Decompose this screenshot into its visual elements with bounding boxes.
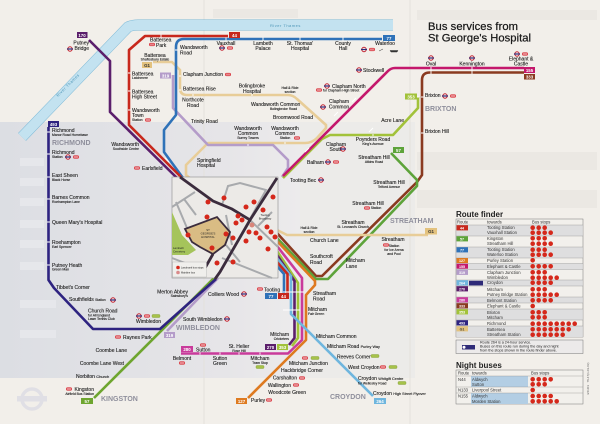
route colour chips: 44 [460, 226, 464, 230]
hospital site [185, 217, 230, 254]
stop labels: south-east: Fair Green [308, 312, 324, 316]
stop labels: north-west: Trinity Road [191, 119, 218, 125]
route finder heading: Route finder [456, 210, 503, 219]
stop labels: north-west: Battersea [144, 53, 166, 59]
destinations: Mitcham [487, 315, 503, 320]
stop labels: south-east: Mitcham [270, 332, 289, 338]
destinations: Battersea [487, 327, 506, 332]
stop labels: Streatham and Clapham: Streatham Hill [358, 155, 390, 161]
stop labels: Streatham and Clapham [290, 56, 534, 270]
bus stop letters [530, 225, 577, 337]
stop labels: north-west: Northcote [182, 98, 204, 104]
stop labels: south-west: Airfield Bus Station [65, 392, 94, 396]
stop labels: route 493: Sainsbury's [171, 294, 188, 298]
stop labels: route 493: Merton Abbey [157, 290, 188, 296]
night table text: towards [472, 370, 487, 376]
destinations: Richmond [487, 321, 507, 326]
cemetery label [173, 246, 186, 254]
route colour chips: 57 [460, 238, 464, 242]
stop labels: south-west: Sutton [213, 356, 227, 362]
route number chips: 280 [183, 347, 191, 352]
stop labels: north-west: Wandsworth [111, 142, 139, 148]
stop labels: south-east: Cricketers [274, 337, 289, 341]
stop labels: Streatham and Clapham: for Clapham High Street [323, 88, 359, 92]
icons: rail [66, 43, 528, 402]
destinations: Wimbledon [487, 275, 509, 280]
night table text: N155 [458, 394, 469, 398]
stop labels: north-west: Hall [339, 46, 347, 52]
stop labels: route 493: Southfields Station [69, 297, 106, 303]
ghost show-through: top strips [213, 9, 597, 208]
stop labels: south-east: Mitcham Junction [289, 361, 328, 367]
stop labels: north-west: Putney [73, 40, 89, 46]
route number chips: 319 [166, 333, 174, 338]
stop labels: north-west: Road [180, 50, 192, 56]
stop labels: north-west: Bridge [75, 46, 89, 52]
route colour chips: G1 [460, 328, 464, 332]
route 77 blue south [277, 266, 284, 294]
route colour chips: 333 [459, 304, 465, 308]
stop labels: north-west: Battersea Rise [183, 86, 216, 92]
stop labels: north-west: Common [275, 131, 295, 137]
route number chips: 77 [269, 294, 274, 299]
table row dividers [456, 225, 583, 326]
night table text: Liverpool Street [472, 388, 502, 392]
destinations: Elephant & Castle [487, 304, 521, 308]
route number chips: 57 [85, 399, 90, 404]
stop labels: north-west: Hospital [197, 163, 215, 169]
cemetery label: Lambeth [173, 246, 184, 250]
stop labels: Streatham and Clapham: Station [371, 206, 381, 210]
stop labels: north-west: Battersea [150, 38, 172, 44]
route colour chips: 155 [459, 265, 465, 269]
stop labels: route 493: Church Road [88, 308, 118, 314]
stop labels: south-west: Rose Hill [232, 349, 246, 353]
route G1 tan [153, 62, 326, 179]
route number chips: 170 [78, 33, 86, 38]
stop labels: route 493: Station [52, 155, 63, 159]
route 264 light blue [277, 258, 373, 396]
destinations: Belmont Station [487, 298, 517, 303]
route 319 lavender [173, 75, 288, 177]
stop labels: route 493: Queen Mary's Hospital [52, 220, 102, 226]
stop labels: route 493 [52, 128, 239, 325]
inset street map [172, 177, 278, 279]
icon: riverboat at Waterloo [379, 49, 398, 52]
stop labels: route 493: Roehampton [52, 240, 81, 246]
stop labels: south-west: Sutton [196, 348, 211, 354]
stop labels: south-west: Tram Stop [252, 361, 268, 365]
stop labels: Streatham and Clapham: Mitcham [346, 258, 365, 264]
stop labels: south-east: Hackbridge Corner [281, 368, 323, 374]
night bus stop letters [530, 377, 559, 404]
stop labels: south-west: Green [213, 361, 227, 367]
route number chips: G1 [428, 229, 434, 234]
stop labels: route 493: East Sheen [52, 173, 78, 179]
stop labels: Streatham and Clapham: Station [389, 244, 399, 248]
print code: 4/41/03 TfL47(1-03-03) [586, 363, 590, 395]
route number chips: 155 [526, 68, 534, 73]
table header: Bus stops [532, 220, 550, 224]
stop labels: north-west: Town [132, 113, 144, 119]
stop labels: north-west: Bolingbroke Road [270, 107, 297, 111]
night table text: Morden Station [472, 399, 501, 404]
stop labels: route 493: Roehampton Lane [52, 200, 80, 204]
stop labels: route 493: Earl Spencer [52, 245, 72, 249]
night table text: Aldwych [472, 377, 488, 382]
table row shading [456, 225, 583, 337]
route 77 blue [164, 39, 382, 178]
destinations: Croydon [487, 280, 503, 285]
stop labels: Streatham and Clapham: Streatham [381, 237, 405, 243]
map panel [172, 177, 278, 278]
route colour chips: 353 [459, 310, 465, 314]
stop labels: Streatham and Clapham: Brixton [425, 93, 441, 99]
route colour chips: 493 [459, 322, 465, 326]
route 319 lavender south [167, 278, 218, 331]
icons: underground roundels [65, 46, 520, 321]
background band: left panel [0, 122, 300, 378]
route number chips: 270 [267, 345, 275, 350]
route number chips: G1 [144, 63, 150, 68]
stop labels: north-west: Clapham Junction [183, 72, 223, 78]
stop labels: north-west: Broomwood Road [273, 115, 313, 121]
stop labels: north-west: Lambeth [253, 41, 273, 47]
stop labels: south-east: Reeves Corner [337, 354, 371, 360]
icon: London Transport roundel watermark [17, 389, 47, 409]
destinations: Streatham Hill [487, 241, 513, 246]
map legend [172, 262, 206, 277]
stop labels: south-east: Wallington [268, 383, 291, 389]
stop labels: north-west: Earlsfield [142, 166, 163, 172]
stop labels: Streatham and Clapham: Streatham Hill [373, 180, 405, 186]
background band: centre panel [300, 122, 415, 378]
stop labels: south-east: Carshalton [273, 376, 297, 382]
stop labels: Streatham and Clapham: Elephant & [509, 56, 534, 62]
night buses heading: Night buses [456, 361, 502, 370]
route colour chips: 280 [459, 298, 465, 302]
stop labels: Streatham and Clapham: Road [310, 260, 322, 266]
stop labels: route 493: Lawn Tennis Club [88, 317, 115, 321]
area names: STREATHAM [390, 218, 434, 225]
route 493 navy [48, 127, 216, 329]
stop labels: north-west: Road [187, 103, 199, 109]
night owl chip [469, 281, 483, 285]
stop labels: Streatham and Clapham: King's Avenue [362, 142, 384, 146]
route number chips [48, 32, 535, 404]
stop labels: Streatham and Clapham: Common [329, 104, 349, 110]
stop labels: Streatham and Clapham: South [329, 147, 343, 153]
stop labels: north-west: Park [156, 43, 167, 49]
stop labels: south-east: Purley [251, 398, 266, 404]
River Thames: River Thames [55, 72, 81, 98]
stop labels: south-west: Mitcham [251, 356, 269, 362]
bus stop markers [186, 194, 278, 266]
stop labels: south-west: St. Helier [229, 344, 250, 350]
stop labels: route 493: Barnes Common [52, 195, 90, 201]
stop labels: Streatham and Clapham: Brixton Hill [425, 129, 449, 135]
stop labels: Streatham and Clapham: Southcroft [310, 254, 333, 260]
route number chips: 353 [407, 94, 415, 99]
night table text [458, 370, 549, 404]
destinations: Clapham Junction [487, 270, 521, 275]
route 155 magenta [283, 68, 524, 176]
night table text: Sutton [472, 382, 485, 387]
stop labels: north-west: Battersea [132, 90, 154, 96]
route number chips: 44 [232, 33, 237, 38]
stop labels: north-west: Wandsworth [234, 126, 262, 132]
stop labels: south-east: Woodcote Green [268, 390, 306, 396]
stop labels: north-west: High Street [132, 94, 158, 100]
route 353 light green north [283, 97, 418, 178]
stop labels: north-west: Palace [255, 46, 271, 52]
route 333 brown [277, 72, 524, 276]
destinations: Elephant & Castle [487, 264, 521, 269]
stop labels: route 493: Colliers Wood [208, 292, 239, 298]
area names: RICHMOND [52, 140, 90, 147]
route colour chips: 319 [459, 271, 465, 275]
route number chips: 44 [281, 294, 286, 299]
route number chips: 333 [526, 74, 534, 80]
hospital label [201, 228, 215, 239]
destinations [487, 225, 528, 337]
hospital label: ST [206, 228, 210, 232]
stop labels: Streatham and Clapham: St. Leonard's Church [337, 225, 369, 229]
destinations: Tooting Station [487, 247, 515, 252]
stop labels: route 493: for All England [88, 314, 110, 318]
stop labels: Streatham and Clapham: Acre Lane [381, 118, 404, 124]
stop labels: north-west: County [335, 41, 351, 47]
stop labels: south-west: Coombe Lane [96, 348, 127, 354]
route number chips: 57 [396, 148, 401, 153]
stop labels: north-west: Station [132, 118, 143, 122]
stop labels: north-west: Southside Centre [113, 147, 139, 151]
stop labels: south-east: Croydon Whitgift Centre [358, 376, 403, 382]
area names: KINGSTON [101, 396, 138, 403]
map legend: Landmark bus stops [181, 266, 204, 270]
stop labels: south-east: Streatham [313, 291, 336, 297]
destinations: Mitcham [487, 287, 503, 292]
stop labels: Streatham and Clapham: Atkins Road [365, 160, 383, 164]
grey roads [172, 183, 278, 278]
stop labels: south-west: Coombe Lane West [80, 361, 125, 367]
stop labels: Streatham and Clapham: Clapham [326, 142, 346, 148]
stop labels: Streatham and Clapham: Stockwell [363, 68, 384, 74]
stop labels: south-west: Belmont [173, 356, 192, 362]
route colour chips [456, 225, 468, 332]
Tooting Broadway label: Tooting [260, 213, 270, 217]
stop labels: route 493: Putney Heath [52, 263, 83, 269]
fold line [204, 0, 410, 424]
stop labels: south-west [65, 335, 269, 396]
night buses table [456, 370, 583, 404]
24-hour service note: Route 264 is a 24-hour service. [480, 341, 531, 345]
stop labels: north-west: Surrey Towers [237, 136, 259, 140]
route 170 purple [89, 40, 178, 179]
table header: Route [457, 220, 469, 224]
stop labels: north-west: Shaftesbury Estate [141, 58, 169, 62]
area names: WIMBLEDON [176, 325, 220, 332]
stop labels: north-west: Latchmere [132, 76, 148, 80]
stop labels: route 493: Black Horse [52, 178, 70, 182]
table header: towards [487, 220, 502, 224]
destinations: Purley Station [487, 258, 514, 263]
stop labels: route 493: Tibbet's Corner [56, 285, 90, 291]
stop labels: route 493: Green Man [52, 268, 69, 272]
night table text: N133 [458, 388, 469, 392]
route 44 red [129, 36, 228, 178]
blue highlight [471, 376, 528, 404]
route finder table [456, 219, 583, 337]
stop labels: Streatham and Clapham: Poynders Road [356, 137, 390, 143]
stop labels: south-east: Mitcham Road Purley Way [327, 344, 380, 350]
stop labels: Streatham and Clapham: Balham [307, 160, 324, 166]
route 44 red south [277, 262, 288, 294]
route colour chips: 127 [459, 259, 465, 263]
stop labels: south-west: Raynes Park [123, 335, 152, 341]
stop labels: north-west: Common [238, 131, 258, 137]
Tooting Broadway label [259, 213, 272, 220]
stop labels: route 493: Richmond [52, 150, 75, 156]
24-hour service note: Buses on this route run during the day and night [480, 345, 559, 349]
cemetery label: Cemetery [173, 250, 186, 254]
stop labels: north-west: Waterloo [375, 41, 395, 47]
stop labels: north-west: Springfield [197, 158, 221, 164]
stop labels: south-east: Mitcham Common [316, 334, 357, 340]
route number chips: 353 [279, 345, 287, 350]
route G1 tan south [277, 230, 428, 235]
Tooting Broadway label: Broadway [259, 216, 272, 220]
icons: tram [152, 314, 406, 384]
route colour chips: 264 [459, 282, 465, 286]
stop labels: south-east: Mitcham [308, 307, 327, 313]
route 57 green north [277, 153, 417, 279]
destinations: Kingston [487, 236, 504, 241]
stop labels: south-east: Tooting [264, 288, 280, 294]
stop labels: Streatham and Clapham: Church Lane [310, 238, 339, 244]
stop labels: Streatham and Clapham: Streatham Hill [352, 201, 384, 207]
stop labels: Streatham and Clapham: Oval [426, 62, 436, 68]
stop labels: Streatham and Clapham: and Pool [387, 252, 401, 256]
stop labels: north-west: Wandsworth [180, 45, 208, 51]
destinations: Vauxhall Station [487, 230, 518, 235]
stop labels: north-west [73, 38, 395, 172]
stop labels: north-west: Wandsworth Common [251, 102, 300, 108]
destinations: Brixton [487, 310, 501, 315]
stop labels: Streatham and Clapham: Kennington [459, 62, 485, 68]
route 270 purple south [277, 255, 294, 345]
stop labels: Streatham and Clapham: for Ice Arena [384, 248, 404, 252]
hospital label: GEORGE'S [201, 232, 215, 236]
stop labels: route 493: South Wimbledon [183, 317, 223, 323]
stop labels: route 493: Manor Road Homebase [52, 133, 88, 137]
route number chips: 493 [50, 122, 58, 127]
stop labels: north-west: section [285, 90, 295, 94]
stop labels: north-west: Station [280, 136, 290, 140]
stop ticks [47, 34, 472, 354]
stop labels: south-east: West Croydon [348, 365, 380, 371]
route 127 orange [248, 241, 315, 398]
destinations: Streatham Station [487, 332, 521, 337]
dark main roads [180, 177, 277, 279]
ghost show-through: left rows [20, 158, 56, 338]
route number chips: 319 [162, 73, 170, 78]
stop labels: south-east [251, 288, 427, 404]
route colour chips: 270 [459, 288, 465, 292]
stop labels: route 493: Richmond [52, 128, 75, 134]
route 57 green south [94, 278, 214, 398]
stop labels: Streatham and Clapham: Clapham [329, 99, 349, 105]
stop labels: Streatham and Clapham: Clapham North [332, 84, 366, 90]
route colour chips: 77 [460, 248, 464, 252]
title: St George's Hospital [428, 32, 531, 44]
stop labels: north-west: Wandsworth [271, 126, 299, 132]
stop labels: route 493: Wimbledon [136, 319, 161, 325]
stop labels: north-west: Bolingbroke [239, 84, 265, 90]
stop labels: Streatham and Clapham: Streatham [341, 220, 365, 226]
route number chips: 127 [238, 399, 246, 404]
area names [52, 106, 456, 403]
stop labels: north-west: Hospital [243, 89, 261, 95]
stop labels: Streatham and Clapham: Telford Avenue [378, 185, 400, 189]
destinations: Putney Bridge Station [487, 292, 528, 297]
stop labels: south-west: Norbiton Church [76, 374, 109, 380]
cemetery [172, 212, 196, 255]
stop labels: north-west: Hail & Ride [282, 86, 299, 90]
title: Bus services from [428, 21, 518, 33]
title [428, 21, 531, 44]
24-hour service note: from the stops shown in the route finder above. [480, 349, 557, 353]
night table text: Bus stops [531, 370, 549, 376]
stop labels: north-west: Wandsworth [132, 108, 160, 114]
route number chips: 77 [387, 36, 392, 41]
River Thames: River Thames [270, 23, 301, 28]
table header [457, 220, 550, 224]
stop labels: north-west: Vauxhall [217, 41, 235, 47]
hospital label: HOSPITAL [201, 235, 215, 239]
route number chips: 264 [376, 399, 384, 404]
area names: CROYDON [330, 394, 366, 401]
stop labels: south-east: for Wellesley Road [358, 382, 387, 386]
route 280 pink [181, 246, 302, 354]
stop labels: north-west: St. Thomas' [287, 41, 313, 47]
area names: BRIXTON [425, 106, 456, 113]
stop labels: Streatham and Clapham: Hail & Ride [301, 226, 318, 230]
night table text: Aldwych [472, 394, 488, 398]
map legend: Mainline bus [181, 272, 196, 274]
stop labels: Streatham and Clapham: Castle [514, 62, 528, 68]
stop labels: Streatham and Clapham: section [304, 230, 314, 234]
route 353 light green south [277, 251, 298, 346]
destinations: Waterloo Station [487, 252, 518, 257]
River Thames [22, 23, 393, 137]
stop labels: south-east: Road [313, 296, 325, 302]
stop labels: north-west: Hospital [291, 46, 309, 52]
destinations: Tooting Station [487, 225, 515, 230]
night table text: N44 [458, 377, 466, 382]
stop labels: Streatham and Clapham: Lane [346, 264, 357, 270]
stop labels: north-west: Battersea [132, 72, 154, 78]
stop labels: south-east: Croydon High Street Flyover [373, 391, 427, 397]
stop labels: Streatham and Clapham: Tooting Bec [290, 178, 317, 184]
night table text: Route [458, 370, 470, 376]
stop labels: south-west: Kingston [75, 387, 94, 393]
24-hour service note [456, 340, 583, 354]
